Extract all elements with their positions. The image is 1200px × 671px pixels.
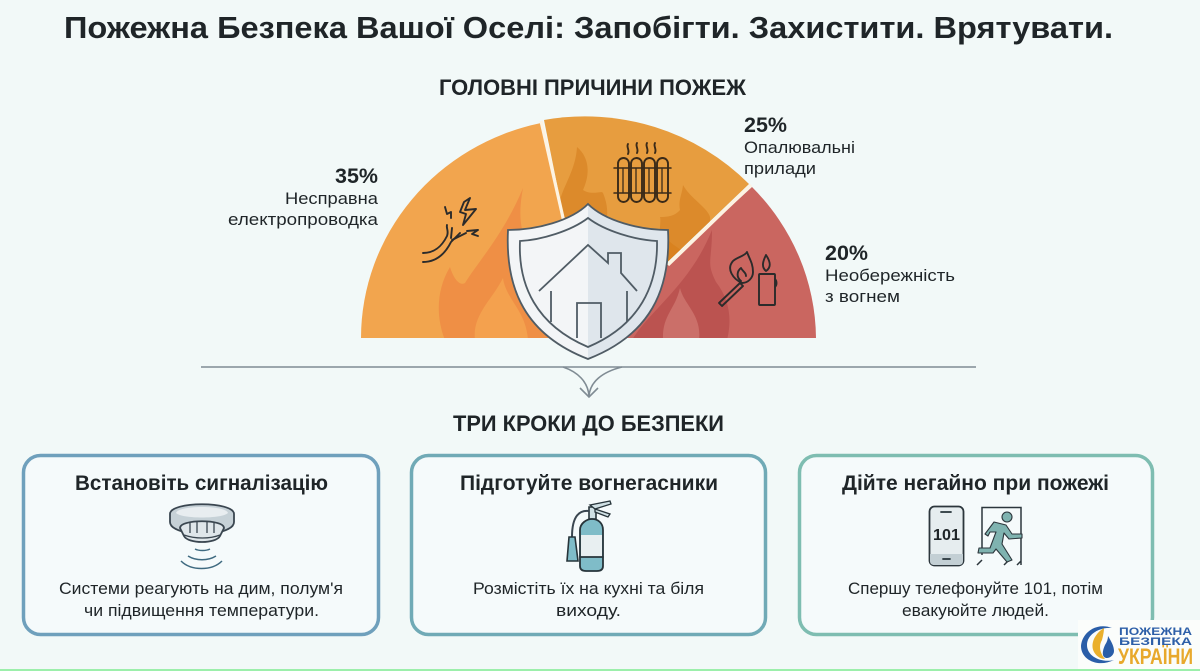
- logo wordmark: БЕЗПЕКА: [1119, 636, 1192, 648]
- segment: heating appliances 25%: [544, 116, 749, 262]
- icon: smoke detector: [170, 504, 234, 568]
- label: 25% heating appliances: Опалювальні: [744, 138, 855, 157]
- label: 25% heating appliances: прилади: [744, 159, 816, 178]
- label: 20% careless fire use: [825, 242, 955, 306]
- label: 35% faulty wiring: електропроводка: [228, 210, 379, 229]
- label: 35% faulty wiring: [228, 165, 379, 229]
- panel: act immediately: [800, 456, 1152, 634]
- heading: install alarm: Встановіть сигналізацію: [75, 472, 328, 495]
- segment: careless fire use 20%: [627, 187, 816, 338]
- text: alarm description: Системи реагують на дим, полум'я: [59, 579, 343, 598]
- text: emergency description: евакуюйте людей.: [902, 601, 1049, 620]
- label: 25% heating appliances: [744, 114, 855, 178]
- logo emblem: [1081, 626, 1114, 663]
- heading: main causes: ГОЛОВНІ ПРИЧИНИ ПОЖЕЖ: [439, 75, 746, 100]
- logo wordmark: ПОЖЕЖНА: [1119, 626, 1192, 638]
- icon: fire extinguisher: [567, 501, 611, 571]
- text: extinguisher description: Розмістіть їх на кухні та біля: [473, 579, 704, 598]
- icon: shield with house: [508, 204, 668, 359]
- icon: phone with 101: [930, 506, 964, 566]
- label: 20% careless fire use: з вогнем: [825, 287, 900, 306]
- text: alarm description: чи підвищення температури.: [84, 601, 319, 620]
- icon: radiator: [614, 143, 671, 202]
- text: extinguisher description: [473, 579, 704, 620]
- heading: three steps: ТРИ КРОКИ ДО БЕЗПЕКИ: [453, 411, 724, 436]
- label: 20% careless fire use: 20%: [825, 242, 868, 265]
- text: extinguisher description: виходу.: [556, 601, 621, 620]
- label: 35% faulty wiring: 35%: [335, 165, 378, 188]
- label: 35% faulty wiring: Несправна: [285, 189, 379, 208]
- icon: phone with 101: 101: [933, 527, 960, 544]
- logo wordmark: [1118, 626, 1193, 669]
- semicircle chart: causes of fires: [355, 115, 825, 345]
- icon: sparking wire: [423, 198, 478, 262]
- label: 20% careless fire use: Необережність: [825, 266, 955, 285]
- text: alarm description: [59, 579, 343, 620]
- logo: Fire Safety of Ukraine: [1078, 620, 1200, 669]
- text: emergency description: [848, 579, 1103, 620]
- panel: install alarm: [24, 456, 378, 634]
- arrow: divider leading to steps: [201, 367, 976, 397]
- label: 25% heating appliances: 25%: [744, 114, 787, 137]
- heading: prepare extinguishers: Підготуйте вогнегасники: [460, 472, 718, 495]
- icon: burning match and candle: [719, 252, 776, 306]
- title: Пожежна Безпека Вашої Оселі: Запобігти. Захистити. Врятувати.: [64, 10, 1113, 45]
- icon: person running through exit: [977, 508, 1022, 565]
- segment: faulty wiring 35%: [361, 123, 562, 338]
- divider lines between segments: [541, 121, 751, 265]
- heading: act immediately: Дійте негайно при пожежі: [842, 472, 1109, 495]
- text: emergency description: Спершу телефонуйте 101, потім: [848, 579, 1103, 598]
- panel: prepare extinguishers: [412, 456, 766, 634]
